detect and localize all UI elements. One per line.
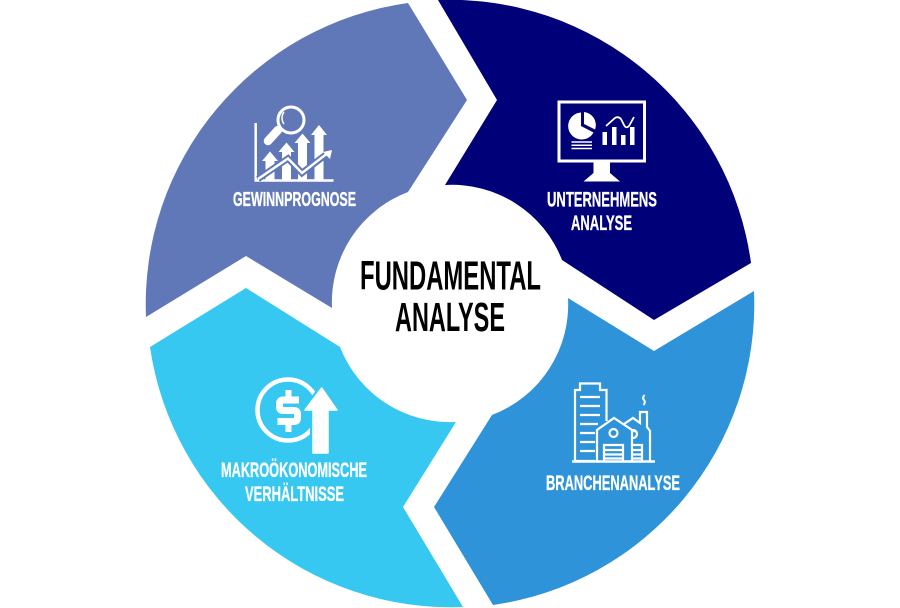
panel: Unternehmensanalyse segment bbox=[438, 0, 751, 320]
icon: office tower and factory bbox=[572, 384, 655, 462]
label: Unternehmens Analyse bbox=[547, 188, 657, 235]
label: Unternehmens Analyse: ANALYSE bbox=[571, 212, 632, 235]
panel: Branchenanalyse segment bbox=[434, 291, 754, 605]
panel: Gewinnprognose segment bbox=[146, 3, 467, 317]
heading: Fundamental Analyse: FUNDAMENTAL bbox=[360, 252, 541, 298]
icon: monitor with pie and bar chart bbox=[559, 102, 644, 182]
label: Makrookonomische Verhaltnisse: VERHÄLTNISSE bbox=[245, 483, 344, 506]
panel: Makrookonomische Verhaltnisse segment bbox=[150, 288, 463, 607]
label: Makrookonomische Verhaltnisse bbox=[221, 459, 367, 506]
heading: Fundamental Analyse: ANALYSE bbox=[395, 294, 505, 340]
label: Makrookonomische Verhaltnisse: MAKROÖKONOMISCHE bbox=[221, 459, 367, 482]
label: Unternehmens Analyse: UNTERNEHMENS bbox=[547, 188, 657, 212]
icon: chart with magnifier and up arrows bbox=[256, 107, 334, 180]
label: Branchenanalyse: BRANCHENANALYSE bbox=[546, 472, 680, 495]
label: Gewinnprognose: GEWINNPROGNOSE bbox=[233, 189, 356, 211]
heading: Fundamental Analyse bbox=[360, 252, 541, 340]
icon: dollar coin with up arrow bbox=[258, 380, 337, 453]
